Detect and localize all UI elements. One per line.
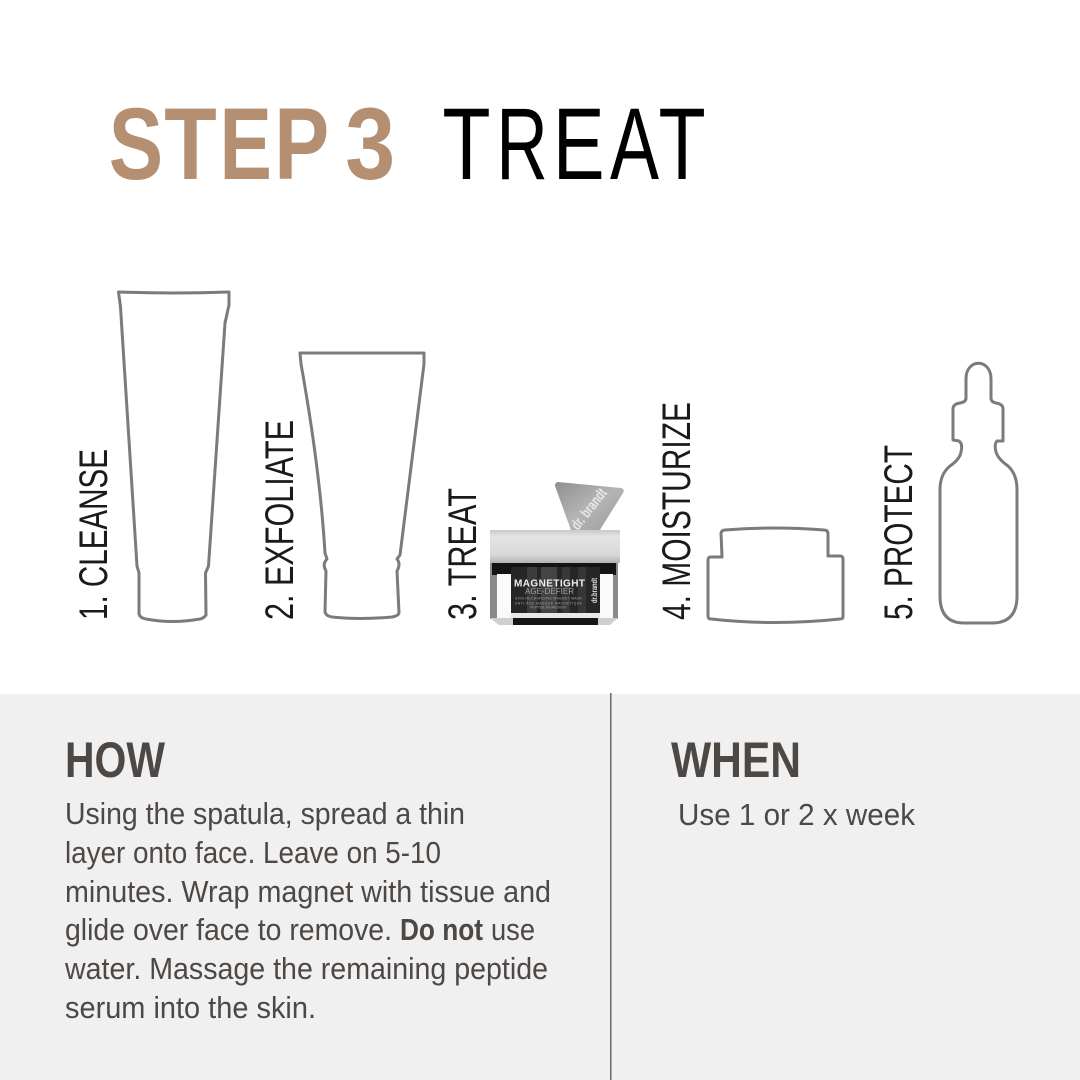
icon: exfoliator tube — [300, 353, 424, 618]
title: 3 — [345, 87, 395, 201]
title: T — [164, 87, 217, 201]
step 4: moisturize label: 4. MOISTURIZE — [655, 402, 699, 620]
title — [109, 87, 706, 201]
step 2: exfoliate label: 2. EXFOLIATE — [258, 420, 302, 620]
step 5: protect label: 5. PROTECT — [877, 445, 921, 620]
step 1: cleanse label: 1. CLEANSE — [72, 449, 116, 620]
title: E — [220, 87, 272, 201]
icon: dropper bottle — [940, 363, 1017, 623]
jar label text: AGE-DEFIER — [525, 587, 574, 596]
title: R — [496, 87, 548, 201]
how instructions: serum into the skin. — [65, 990, 316, 1025]
title: E — [553, 87, 605, 201]
panel: how and when — [0, 693, 1080, 1080]
how instructions: water. Massage the remaining peptide — [64, 951, 548, 986]
column divider — [610, 693, 612, 1080]
title: T — [442, 87, 491, 201]
jar label text: MAGNETIGHT — [514, 578, 585, 590]
jar body — [490, 563, 618, 625]
jar label text: dr.brandt — [590, 578, 599, 603]
title: P — [274, 87, 329, 201]
when instructions: Use 1 or 2 x week — [678, 797, 915, 832]
spatula: dr. brandt — [568, 485, 611, 533]
icon: cleanser tube — [118, 292, 229, 622]
jar label text: ANTI-ÂGE MASQUE MAGNÉTIQUE — [515, 600, 583, 606]
panel background — [0, 694, 1080, 1080]
icon: moisturizer jar — [708, 528, 843, 622]
step 3: treat label: 3. TREAT — [441, 488, 485, 620]
how instructions: Do not — [400, 912, 483, 947]
spatula — [555, 482, 624, 533]
jar lid — [490, 530, 620, 563]
how instructions: use — [491, 912, 535, 947]
how instructions: glide over face to remove. — [65, 912, 392, 947]
how instructions — [64, 796, 551, 1025]
title: S — [109, 87, 163, 201]
how heading: HOW — [65, 732, 166, 788]
how instructions: Using the spatula, spread a thin — [65, 796, 465, 831]
how instructions: layer onto face. Leave on 5-10 — [65, 835, 441, 870]
when heading: WHEN — [671, 732, 801, 788]
product: magnet mask jar with spatula — [490, 482, 624, 625]
jar label text: SKIN RECHARGING MAGNET MASK — [515, 596, 583, 600]
title: T — [658, 87, 706, 201]
jar label text — [514, 578, 599, 610]
jar label text: PEPTIDE INGREDIENT — [530, 606, 568, 610]
how instructions: minutes. Wrap magnet with tissue and — [65, 874, 551, 909]
title: A — [610, 87, 659, 201]
